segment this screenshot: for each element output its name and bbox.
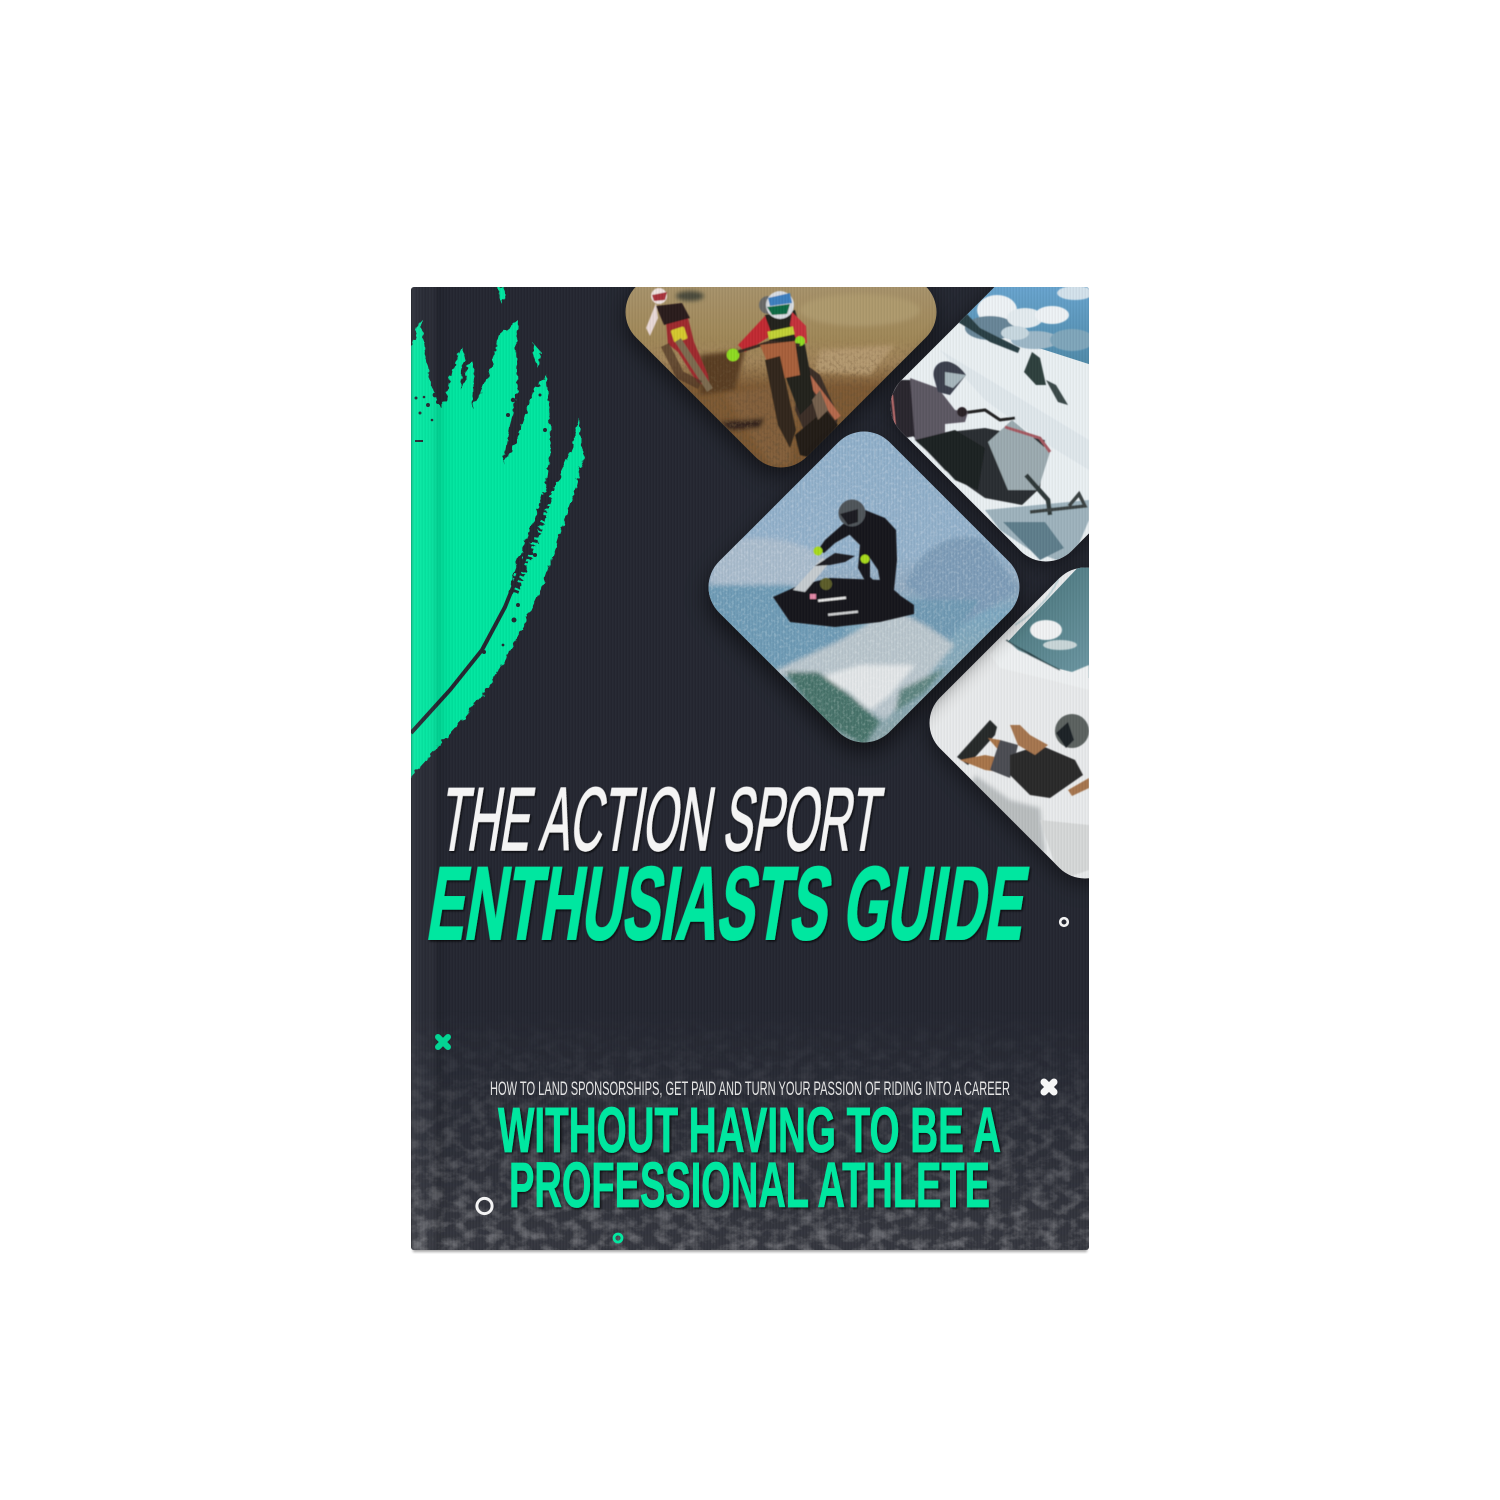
title [421,770,1036,962]
icon: large white ring [477,1198,492,1214]
sled rider [888,361,985,490]
rider [957,714,1089,798]
photo: snowmobile [887,287,1089,569]
snow shadow [971,774,1046,854]
background mountains [411,1044,1089,1250]
headline [498,1094,1001,1221]
headline line 1: WITHOUT HAVING TO BE A [498,1094,1001,1166]
cover background [411,287,1089,1250]
clouds [965,286,1094,351]
spray hump [906,536,1020,616]
icon: small white ring [1060,918,1068,926]
jet ski craft [773,553,914,627]
brush speckled gap [513,478,553,592]
rider left [646,288,710,390]
green brush stroke [408,287,583,780]
spine shading [411,287,444,1250]
photo: motocross [621,287,940,480]
photo: snowboarder [926,568,1089,887]
wake [776,615,956,721]
tree lines [958,312,1020,353]
jet ski rider [814,500,900,595]
fabric texture [414,287,1089,878]
title line 2: ENTHUSIASTS GUIDE [421,846,1036,962]
sled [913,410,1085,515]
icon: green ring [614,1234,622,1242]
book cover mockup [411,287,1089,1254]
subtitle: HOW TO LAND SPONSORSHIPS, GET PAID AND TURN YOUR PASSION OF RIDING INTO A CAREER [490,1078,1010,1100]
book cover [411,287,1089,1250]
photo: jet ski [693,425,1034,767]
green water [785,672,880,745]
headline line 2: PROFESSIONAL ATHLETE [509,1149,990,1221]
ground shadow [985,500,1089,565]
title line 1: THE ACTION SPORT [435,770,889,870]
book drop shadow [413,1246,1087,1252]
water band [708,583,849,669]
brush speckles [414,348,547,654]
icon: white cross [1044,1082,1054,1092]
brush scratch line [411,545,530,733]
icon: green cross [438,1037,448,1047]
rider centre [726,291,838,458]
